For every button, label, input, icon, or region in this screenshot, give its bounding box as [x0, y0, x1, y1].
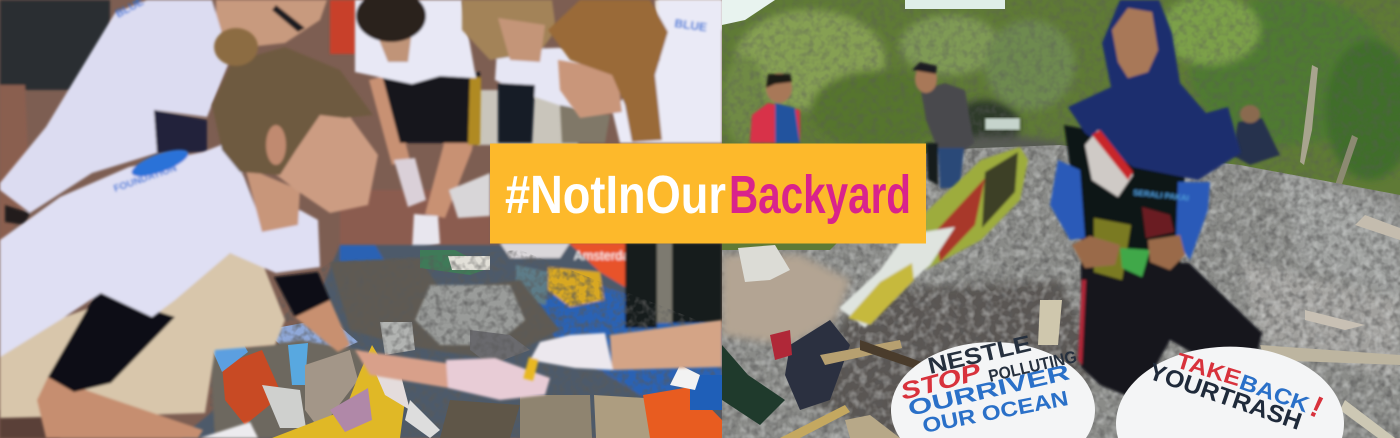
person: volunteer with blond hair behind	[462, 0, 610, 143]
sachets	[1094, 218, 1131, 280]
person: crouching man in background	[1232, 105, 1280, 165]
icon: shirt logo	[130, 148, 190, 178]
hijab	[1068, 0, 1241, 180]
torso	[1064, 125, 1185, 265]
text: polluting: POLLUTING	[987, 347, 1079, 386]
title banner: #NotInOurBackyard	[490, 144, 926, 244]
text: orange banner: Amsterdam	[574, 248, 640, 263]
face	[1112, 8, 1158, 78]
ground: rubbish field and sand	[722, 130, 1400, 438]
person: volunteer upper left	[0, 0, 327, 225]
protest sign: yellow green paddle	[839, 147, 1028, 328]
text: shirt print: SERALI PAKAI	[1133, 188, 1189, 203]
person: girl in blue hijab holding sachets	[1050, 0, 1262, 400]
hand sanitiser style waste on chest	[1085, 130, 1133, 197]
text: BACK!: BACK	[1236, 369, 1313, 417]
text: NESTLE: NESTLE	[925, 330, 1033, 379]
text: your trash: YOURTRASH	[1145, 358, 1305, 436]
person: arm reaching in from right	[523, 320, 722, 381]
title text: Backyard	[729, 165, 911, 225]
text: TAKE: TAKE	[1174, 348, 1244, 391]
text: our ocean: OUR OCEAN	[921, 387, 1070, 438]
person: man in grey shirt	[912, 62, 974, 188]
ground: blue tarp and orange sign	[180, 243, 722, 438]
person: volunteer with ponytail at right	[548, 0, 722, 143]
legs	[1081, 260, 1262, 400]
person: woman in foreground sorting waste	[0, 28, 550, 438]
background: people's legs and paving	[0, 0, 722, 438]
title text: #NotInOur	[505, 165, 726, 225]
background: mangrove trees and sky	[722, 0, 1400, 190]
protest sign: Nestle stop polluting	[891, 330, 1095, 438]
panel: right photo of girl at plastic dump	[722, 0, 1400, 438]
person: volunteer in centre with dark hair	[355, 0, 490, 250]
text: shirt print: FOUNDATION	[112, 163, 178, 195]
text: shirt print: BLUE	[674, 16, 708, 35]
person: man in red life jacket	[750, 73, 800, 143]
text: our river: OURRIVER	[906, 359, 1072, 421]
hands	[1072, 236, 1120, 268]
waste pile	[210, 250, 722, 438]
sleeves	[1050, 160, 1085, 240]
panel: left photo of volunteers sorting waste	[0, 0, 722, 438]
protest sign: take back your trash	[1116, 347, 1344, 438]
text: exclamation mark: !	[1305, 390, 1328, 425]
text: STOP: STOP	[898, 358, 985, 406]
